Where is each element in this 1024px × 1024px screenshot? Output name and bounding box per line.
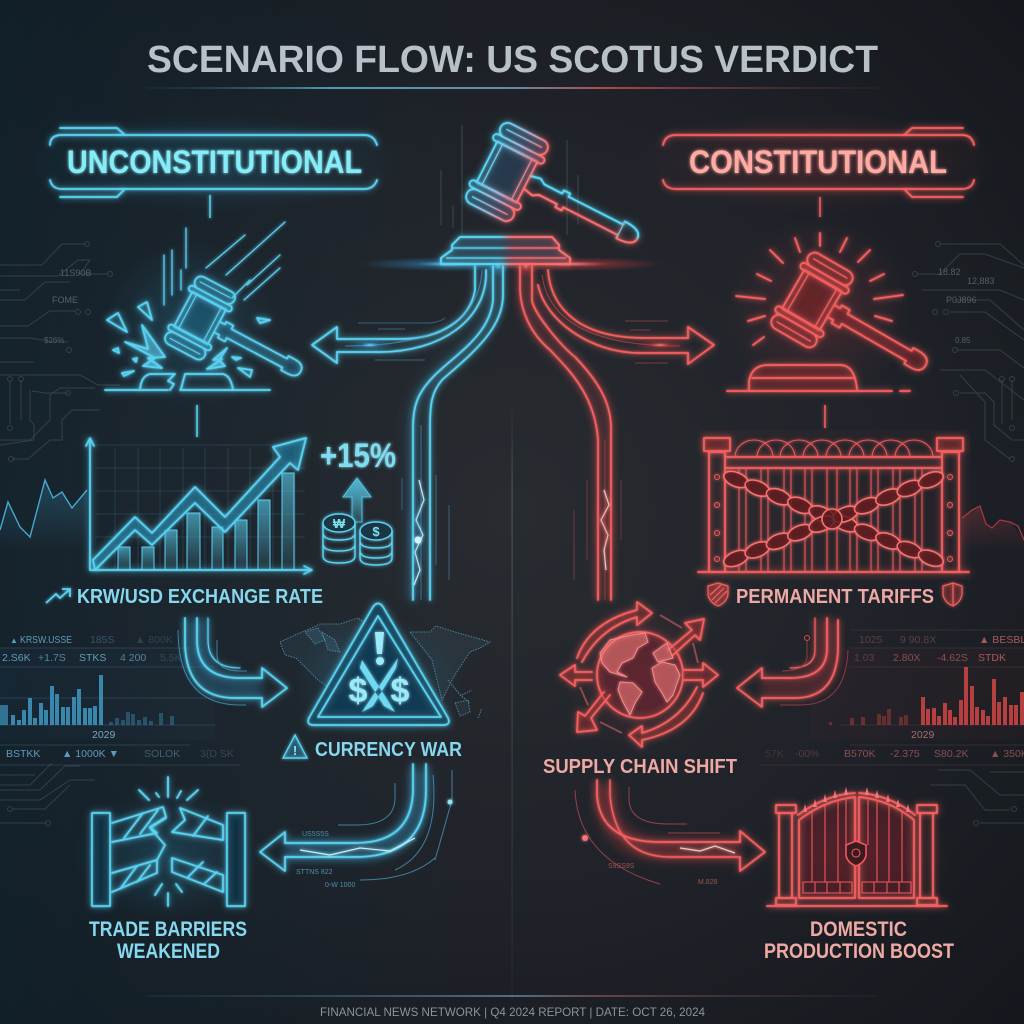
circuit traces left (0, 242, 120, 826)
panel heading: unconstitutional: UNCONSTITUTIONAL (67, 144, 362, 180)
ticker panel left: 2029 (92, 729, 116, 741)
circuit traces left: $26% (44, 336, 64, 345)
connector ticks (197, 195, 825, 437)
central red flow with right arrow (520, 265, 714, 600)
ticker panel left (0, 634, 240, 765)
label: currency war: ! (293, 743, 297, 758)
label: supply chain shift: SUPPLY CHAIN SHIFT (543, 756, 737, 778)
ticker panel right: B570K (844, 748, 876, 760)
ticker panel left: ▲ 1000K ▼ (62, 748, 119, 760)
icon: shattering gavel (105, 222, 318, 410)
footer rule (147, 995, 878, 997)
ticker panel right: -2.375 (890, 748, 920, 760)
title underline (147, 87, 878, 89)
ticker panel left: 3(D SK (200, 748, 234, 760)
label: trade barriers weakened: WEAKENED (117, 940, 220, 963)
label: currency war: CURRENCY WAR (315, 739, 462, 761)
ticker panel right: STDK (978, 652, 1006, 664)
metric: +15%: +15% (320, 437, 396, 475)
circuit traces left: FOME (52, 295, 78, 305)
circuit traces left: 11S90B (60, 268, 91, 278)
ticker panel right: S80.2K (934, 748, 968, 760)
circuit traces right: P0J896 (946, 295, 977, 305)
chart: left sparkline (0, 480, 87, 550)
label: currency war (283, 735, 462, 761)
center divider line (512, 400, 513, 1000)
arrow: red flow into domestic production (575, 780, 765, 886)
arrow: blue flow into trade barriers: US5S5S (302, 831, 329, 838)
ticker panel right (760, 630, 1024, 765)
panel heading: constitutional: CONSTITUTIONAL (689, 144, 947, 180)
icon: fence with chains (698, 430, 970, 580)
ticker panel right: 1025 (859, 634, 883, 646)
ticker panel left: ▲ 800K (135, 634, 173, 646)
icon: domestic production gate (762, 787, 952, 920)
label: domestic production boost (764, 918, 954, 963)
arrow: blue flow into trade barriers: STTNS 822 (296, 869, 333, 876)
arrow: blue flow into trade barriers (260, 764, 452, 889)
ticker panel right: 9 90.8X (900, 634, 936, 646)
ticker panel right: 1.03 (854, 652, 875, 664)
ticker panel left: 2.S6K (2, 652, 31, 664)
panel heading: unconstitutional (22, 112, 402, 212)
circuit traces right: 12,883 (967, 276, 995, 286)
ticker panel right: 2029 (911, 729, 935, 741)
icon: currency war warning triangle: $ (349, 672, 368, 710)
arrow: blue flow into currency war (178, 618, 287, 707)
icon: up arrow and coins (323, 478, 392, 565)
circuit traces right (912, 242, 1024, 826)
ticker panel left: 4 200 (120, 652, 146, 664)
icon: currency war warning triangle (293, 604, 463, 742)
central blue flow with left arrow (312, 265, 503, 600)
arrow: red flow into supply chain (737, 618, 848, 707)
circuit traces right: 18.82 (938, 267, 961, 277)
label: KRW/USD exchange rate: KRW/USD EXCHANGE RATE (77, 586, 323, 608)
label: domestic production boost: PRODUCTION BOOST (764, 940, 954, 963)
ticker panel right: -4.62S (937, 652, 968, 664)
label: domestic production boost: DOMESTIC (810, 918, 907, 941)
ticker panel left: 185S (90, 634, 115, 646)
ticker panel right: -00% (795, 748, 820, 760)
title: SCENARIO FLOW: US SCOTUS VERDICT (147, 39, 878, 81)
ticker panel left: +1.7S (38, 652, 66, 664)
chart: KRW/USD exchange rate (86, 438, 312, 574)
label: trade barriers weakened: TRADE BARRIERS (89, 918, 247, 941)
icon: up arrow and coins: $ (372, 524, 380, 539)
ticker panel left: STKS (79, 652, 106, 664)
icon: up arrow and coins: ₩ (333, 516, 346, 531)
ticker panel left: SOLOK (144, 748, 180, 760)
ticker panel left: ▲ (10, 636, 18, 645)
ticker panel left: BSTKK (6, 748, 40, 760)
label: permanent tariffs: PERMANENT TARIFFS (736, 586, 934, 608)
arrow: red flow into domestic production: M.828 (698, 879, 718, 886)
central flare behind pipes (360, 255, 664, 277)
ticker panel right: 57K (765, 748, 784, 760)
circuit traces right: 0.85 (955, 336, 971, 345)
chart: right sparkline (962, 506, 1024, 550)
icon: currency war warning triangle: $ (391, 672, 410, 710)
icon: globe supply chain shift (560, 600, 718, 750)
arrow: blue flow into trade barriers: 0-W 1000 (325, 882, 355, 889)
icon: central gavel on base (441, 119, 658, 278)
arrow: red flow into domestic production: S9SS9S (608, 863, 635, 870)
panel heading: constitutional (638, 112, 998, 212)
label: trade barriers weakened (89, 918, 247, 963)
ticker panel left: KRSW.USSE (20, 634, 72, 646)
world map behind warning (280, 618, 490, 718)
icon: red gavel on base (726, 218, 947, 403)
ticker panel right: 2.80X (893, 652, 920, 664)
icon: broken trade barrier (73, 777, 263, 920)
footer source line: FINANCIAL NEWS NETWORK | Q4 2024 REPORT | DATE: OCT 26, 2024 (320, 1005, 705, 1019)
ticker panel left: 5.5K (160, 652, 182, 664)
